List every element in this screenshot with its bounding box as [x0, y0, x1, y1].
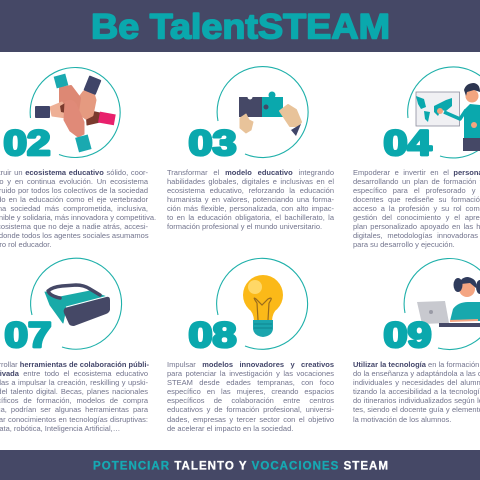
text block 08: para potenciar la investigación y las vocaciones [167, 369, 334, 378]
text block 03: ecosistema educativo, reforzando la educación [167, 186, 334, 195]
number 07: 07 [4, 316, 52, 355]
text block 08: educativos y de formación profesional, universi- [167, 405, 334, 414]
panel 07 circle [31, 258, 122, 349]
panel 04 circle [408, 67, 480, 158]
text block 08: STEAM desde edades tempranas, con foco [167, 378, 334, 387]
text block 03: humanista y en valores, potenciando una forma- [167, 195, 334, 204]
panel 03 circle [217, 67, 308, 158]
number 02: 02 [4, 124, 50, 163]
panel 02 circle [30, 68, 120, 158]
number 03: 03 [188, 124, 236, 163]
icon: hands together [35, 74, 116, 152]
title: Be TalentSTEAM [91, 8, 390, 46]
text block 08 [167, 360, 334, 433]
text block 08: dades, empresas y tercer sector con el objetivo [167, 415, 334, 424]
text block 08: específicos de colaboración entre centros [167, 396, 334, 405]
panel 08 circle [217, 258, 308, 349]
header band [0, 0, 480, 52]
icon: girl with laptop [417, 277, 480, 327]
text block 04 [353, 168, 480, 249]
footer slogan: POTENCIAR TALENTO Y VOCACIONES STEAM [93, 460, 388, 472]
icon: virtual reality headset [45, 285, 110, 326]
text block 08: Impulsar modelos innovadores y creativos [167, 360, 334, 369]
text block 03: ción más flexible, personalizada, con alto impac- [167, 204, 334, 213]
number 04: 04 [384, 124, 432, 163]
text block 08: de acelerar el impacto en la sociedad. [167, 424, 293, 433]
text block 09 [353, 360, 480, 424]
text block 07 [0, 360, 149, 433]
icon: puzzle and hands [239, 92, 301, 136]
number 09: 09 [384, 316, 432, 355]
text block 02 [0, 168, 156, 249]
icon: light bulb [243, 275, 283, 337]
text block 09: la motivación de los alumnos. [353, 415, 451, 424]
text block 08: específico en las mujeres, creando espacios [167, 387, 334, 396]
text block 03: habilidades globales, digitales e inclusivas en el [167, 177, 334, 186]
text block 03 [167, 168, 334, 231]
footer band [0, 450, 480, 480]
icon: teacher with world map [416, 83, 480, 151]
number 08: 08 [188, 316, 236, 355]
text block 04: para su desarrollo y ejecución. [353, 240, 455, 249]
text block 03: formación profesional y el mundo universitario. [167, 222, 322, 231]
text block 03: to en la educación obligatoria, el bachillerato, la [167, 213, 334, 222]
panel 09 circle [404, 259, 480, 350]
text block 03: Transformar el modelo educativo integrando [167, 168, 334, 176]
